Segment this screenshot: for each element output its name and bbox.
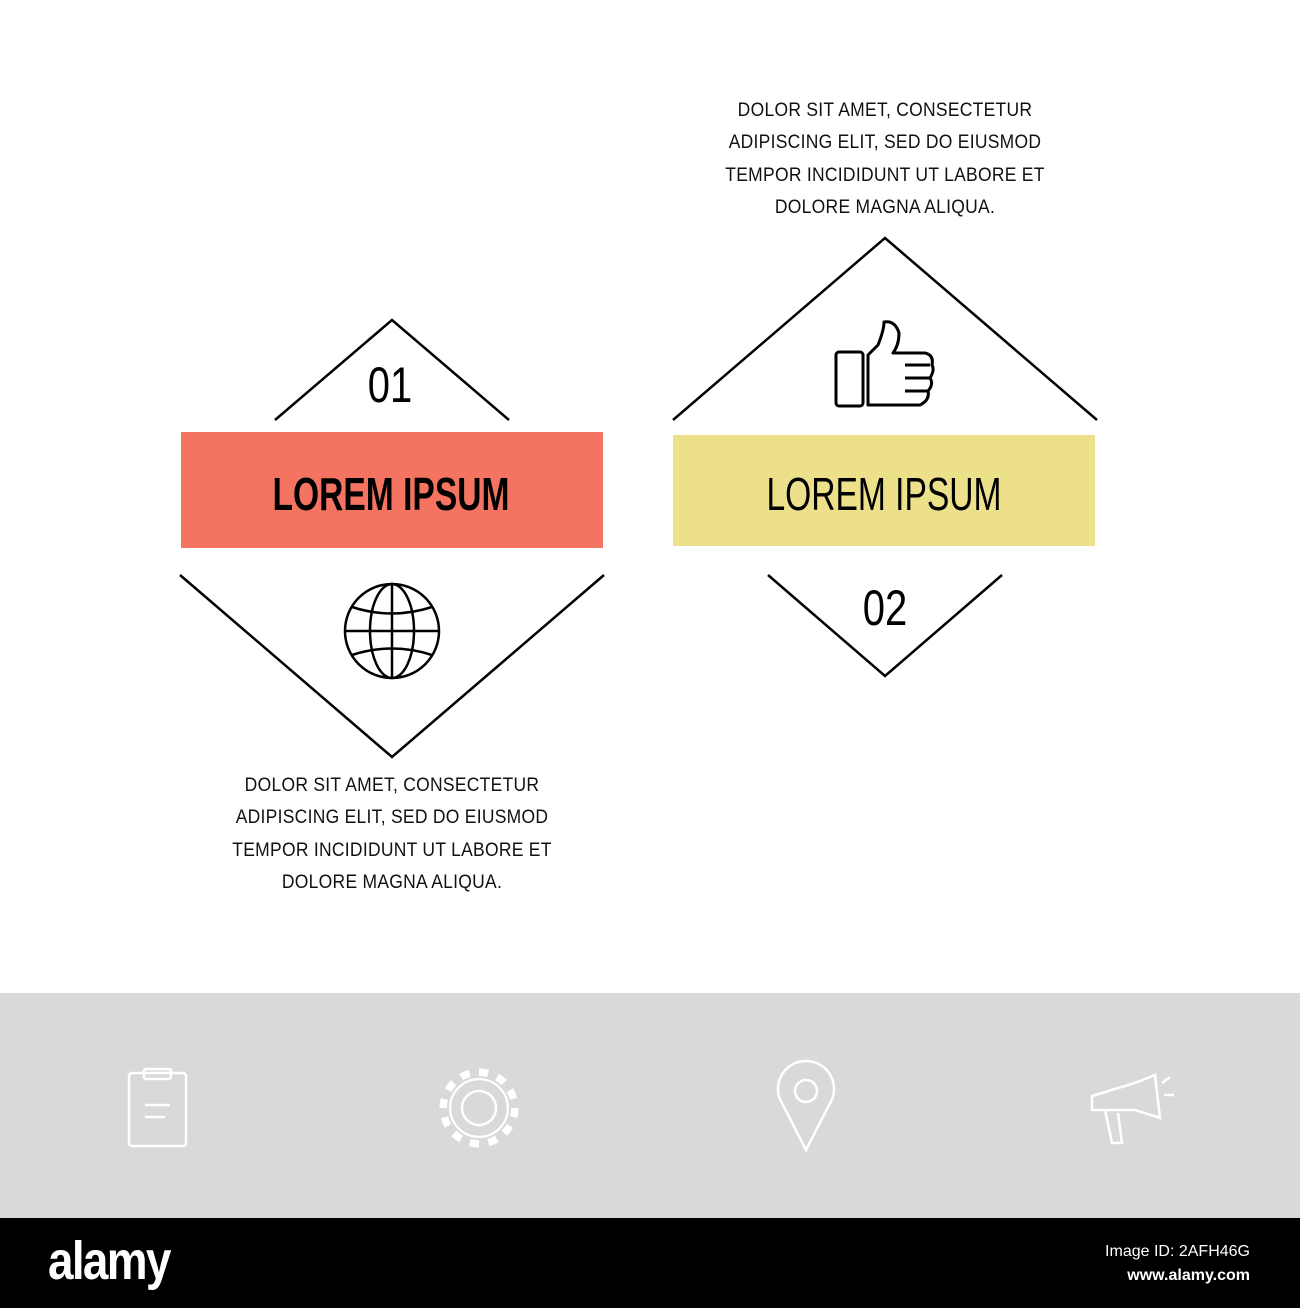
- icon: location pin: [778, 1061, 834, 1150]
- red banner: [181, 432, 603, 548]
- logo: alamy: [48, 1231, 170, 1291]
- lower triangle 01: [180, 575, 604, 757]
- upper triangle 01: [275, 320, 509, 420]
- footer: [0, 1218, 1300, 1308]
- text block: step 01 description: ADIPISCING ELIT, SED DO EIUSMOD: [236, 807, 548, 828]
- panel: step 02: [673, 238, 1097, 676]
- number 02: 02: [863, 580, 907, 636]
- icon: megaphone: [1092, 1075, 1174, 1143]
- icon: thumbs up: [836, 322, 933, 406]
- image id: www.alamy.com: [1127, 1267, 1250, 1284]
- text block: step 01 description: [232, 775, 552, 893]
- image id: Image ID: 2AFH46G: [1105, 1243, 1250, 1260]
- number 01: 01: [368, 357, 412, 413]
- main diagram: [179, 236, 1098, 759]
- banner title 01: LOREM IPSUM: [273, 469, 509, 520]
- text block: step 02 description: [725, 100, 1045, 218]
- icon: clipboard: [129, 1069, 186, 1146]
- text block: step 01 description: DOLORE MAGNA ALIQUA.: [282, 872, 502, 893]
- icon: gear: [444, 1073, 514, 1143]
- text block: step 02 description: DOLORE MAGNA ALIQUA.: [775, 197, 995, 218]
- upper triangle 02: [673, 238, 1097, 420]
- yellow banner: [673, 435, 1095, 546]
- text block: step 01 description: DOLOR SIT AMET, CONSECTETUR: [245, 775, 539, 796]
- text block: step 02 description: ADIPISCING ELIT, SED DO EIUSMOD: [729, 132, 1041, 153]
- text block: step 02 description: DOLOR SIT AMET, CONSECTETUR: [738, 100, 1032, 121]
- icon: globe: [345, 584, 439, 678]
- text block: step 01 description: TEMPOR INCIDIDUNT UT LABORE ET: [232, 840, 552, 861]
- lower triangle 02: [768, 575, 1002, 676]
- text block: step 02 description: TEMPOR INCIDIDUNT UT LABORE ET: [725, 165, 1045, 186]
- banner title 02: LOREM IPSUM: [766, 469, 1002, 520]
- icon band: [0, 993, 1300, 1218]
- image id: [1105, 1243, 1250, 1284]
- panel: step 01: [180, 320, 604, 757]
